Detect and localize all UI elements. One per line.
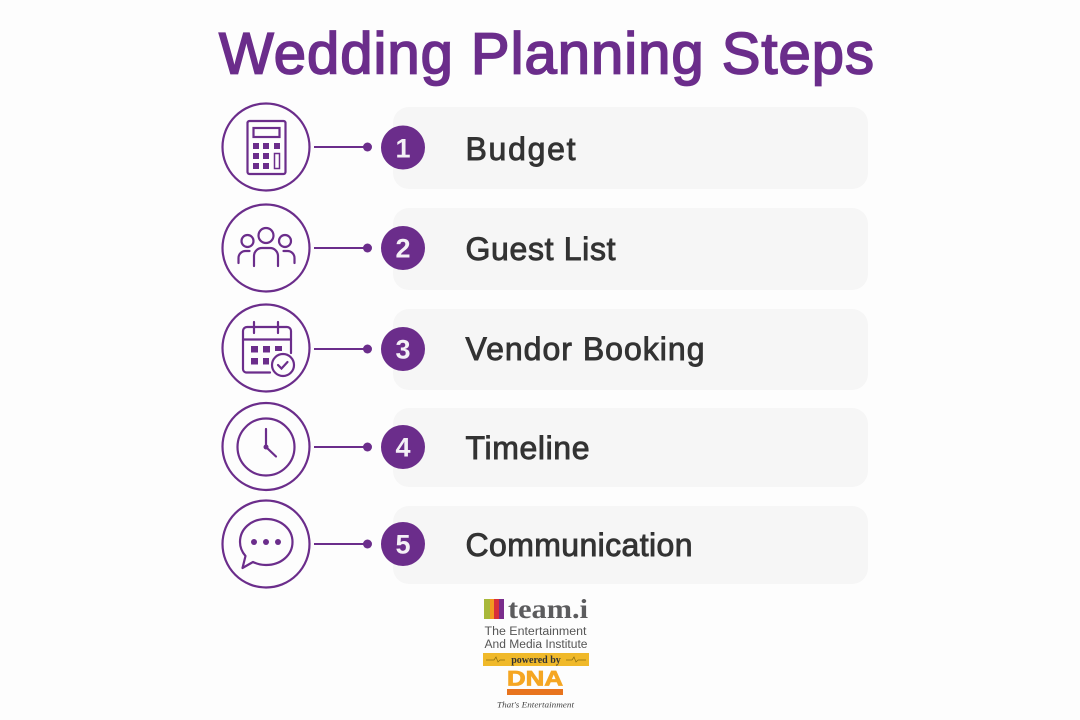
connector 5 (314, 540, 372, 548)
icon: speech bubble (222, 500, 310, 588)
badge 5 (381, 522, 425, 566)
badge 1 (381, 126, 425, 170)
icon: clock (222, 403, 310, 490)
logo: team.i and DNA (483, 594, 589, 710)
label: guest list: Guest List (466, 231, 616, 267)
step 5: communication (222, 500, 868, 588)
connector 3 (314, 344, 372, 354)
panel: timeline (393, 408, 868, 487)
step 1: budget (222, 104, 868, 190)
DNA tagline: That's Entertainment (497, 700, 575, 710)
step 4: timeline (222, 403, 868, 490)
powered by band: powered by (511, 655, 561, 666)
connector 2 (314, 244, 372, 252)
step 3: vendor booking (222, 304, 868, 392)
badge 4: 4 (395, 432, 411, 462)
icon: calendar (222, 304, 310, 392)
badge 2 (381, 226, 425, 270)
badge 3 (381, 327, 425, 371)
panel: guest list (393, 208, 868, 290)
connector 4 (314, 442, 372, 452)
panel: vendor booking (393, 309, 868, 390)
connector 1 (314, 142, 372, 152)
logo wordmark: team.i (508, 594, 589, 624)
logo: team.i and DNA: And Media Institute (484, 639, 588, 651)
badge 1: 1 (395, 134, 411, 164)
icon: people (222, 204, 310, 292)
panel: budget (393, 107, 868, 189)
label: communication: Communication (466, 527, 692, 563)
label: timeline: Timeline (466, 430, 590, 466)
label: budget: Budget (466, 131, 576, 167)
badge 3: 3 (395, 334, 411, 364)
logo mark: colour bars (484, 599, 504, 619)
label: vendor booking: Vendor Booking (466, 331, 704, 367)
badge 5: 5 (395, 530, 411, 560)
step 2: guest list (222, 204, 868, 292)
DNA logo: DNA (507, 668, 563, 690)
badge 2: 2 (395, 234, 411, 264)
icon: calculator (222, 104, 310, 190)
panel: communication (393, 506, 868, 584)
logo tagline: The Entertainment (484, 626, 587, 638)
badge 4 (381, 425, 425, 469)
title: Wedding Planning Steps (219, 22, 874, 86)
